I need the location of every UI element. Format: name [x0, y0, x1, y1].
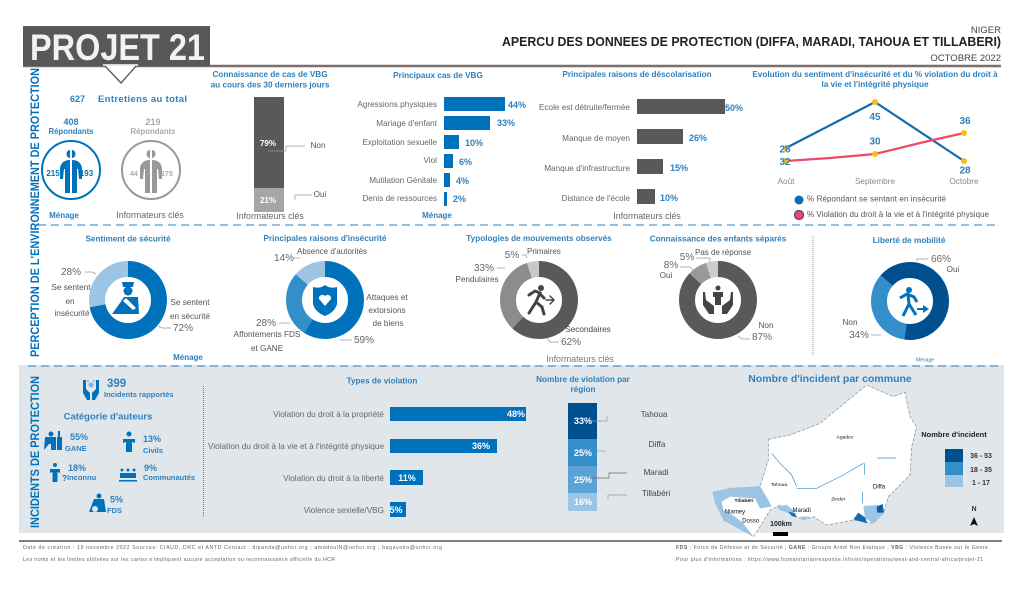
chart: main GBV cases: Mutilation Génitale [369, 176, 437, 185]
chart: violation types: 11% [398, 473, 416, 483]
icon: hands protecting a child [703, 286, 733, 314]
icon: civilians [123, 432, 135, 452]
chart: knowledge of GBV cases: 21% [260, 196, 276, 205]
donut: feeling of safety: en sécurité [170, 312, 210, 321]
donut: separated children: Connaissance des enfants séparés [650, 234, 787, 244]
section label: incidents: INCIDENTS DE PROTECTION [28, 376, 42, 528]
header title block: APERCU DES DONNEES DE PROTECTION (DIFFA, MARADI, TAHOUA ET TILLABERI) [502, 35, 1001, 49]
chart: knowledge of GBV cases: Oui [314, 190, 327, 199]
map legend: Nombre d'incident [921, 430, 987, 439]
panel: respondents: Entretiens au total [98, 94, 187, 105]
header title block: NIGER [971, 25, 1001, 36]
donut: feeling of safety: Se sentent [170, 298, 210, 307]
icon: communities [119, 468, 137, 482]
icon: key informants: 44 [130, 171, 138, 178]
donut: freedom of movement: Liberté de mobilité [873, 236, 946, 245]
map: incidents by commune: Agadez [837, 434, 854, 440]
chart: violations by region: Diffa [649, 440, 666, 449]
footer: sources and notes: Date de création : 19 novembre 2022 Sources: CIAUD, DRC et ANTD Contact : dipanda@unhcr.org ; amadoulN@unhcr.org ; bagayoko@unhcr.org [23, 545, 442, 551]
panel: incidents reported: Inconnu [67, 473, 97, 482]
donut: freedom of movement: 66% [931, 254, 951, 265]
chart: insecurity and rights-violation trend: Août [778, 177, 795, 186]
panel: respondents: Ménage [49, 211, 79, 220]
panel: incidents reported [44, 378, 195, 515]
chart: knowledge of GBV cases [211, 70, 330, 221]
chart: main GBV cases: Denis de ressources [362, 194, 437, 203]
chart: knowledge of GBV cases: au cours des 30 derniers jours [211, 80, 330, 90]
donut: reasons for insecurity: Principales raisons d'insécurité [264, 234, 387, 243]
chart: main GBV cases: 44% [508, 100, 526, 110]
donut: freedom of movement: Oui [947, 265, 960, 274]
chart: insecurity and rights-violation trend: 30 [869, 136, 881, 148]
donut: feeling of safety: Se sentent [51, 283, 91, 292]
chart: main GBV cases: Viol [423, 156, 437, 165]
chart: insecurity and rights-violation trend: 32 [779, 157, 791, 168]
chart: main GBV cases: 10% [465, 138, 483, 148]
map: incidents by commune: Dosso [742, 519, 760, 525]
panel: incidents reported: 18% [68, 463, 86, 473]
chart: main GBV cases: 2% [453, 194, 466, 204]
icon: person walking with arrow [900, 287, 929, 316]
map: incidents by commune: Nombre d'incident par commune [748, 373, 912, 385]
donut: freedom of movement: Ménage [916, 358, 934, 364]
icon: security forces [89, 494, 106, 512]
icon: key informants: 175 [161, 171, 173, 178]
donut: movement typologies [455, 234, 614, 364]
panel: incidents reported: FDS [107, 506, 122, 515]
chart: violations by region: Tahoua [641, 410, 668, 419]
map: incidents by commune: 100km [770, 521, 792, 528]
chart: violation types: Violation du droit à la propriété [273, 410, 384, 419]
chart: insecurity and rights-violation trend: Evolution du sentiment d'insécurité et du % violation du droit à [752, 70, 998, 79]
footer: sources and notes: Pour plus d'informations : https://www.humanitarianresponse.info/en/operations/west-and-central-africa/projet-21 [676, 557, 983, 563]
chart: insecurity and rights-violation trend: la vie et l'intégrité physique [821, 80, 929, 89]
panel: incidents reported: 399 [107, 378, 126, 390]
map: incidents by commune: Diffa [873, 485, 886, 491]
donut: separated children: Non [758, 321, 774, 330]
panel: incidents reported: 13% [143, 434, 161, 444]
chart: violation types: 5% [389, 505, 403, 515]
donut: movement typologies: Typologies de mouvements observés [466, 234, 612, 243]
icon: officer [112, 282, 139, 314]
donut: freedom of movement [842, 236, 960, 364]
chart: reasons for leaving school: Ecole est détruite/fermée [539, 103, 630, 112]
footer: sources and notes: Les noms et les limites utilisées sur les cartes n'impliquent aucune acceptation ou reconnaissance officielle du HCR [23, 557, 335, 563]
panel: respondents [42, 94, 187, 220]
icon: person moving [529, 285, 554, 314]
panel: respondents: 219 [145, 117, 161, 127]
map legend: 1 - 17 [972, 480, 990, 487]
chart: reasons for leaving school: 50% [725, 103, 743, 113]
icon: shield with heart [313, 285, 337, 316]
chart: main GBV cases: Ménage [422, 211, 452, 220]
panel: incidents reported: Civils [143, 446, 163, 455]
panel: respondents: 627 [70, 94, 85, 104]
panel: incidents reported: 55% [70, 432, 88, 442]
donut: reasons for insecurity: extorsions [368, 306, 406, 315]
donut: separated children: 87% [752, 332, 772, 343]
chart: violations by region: Tillabéri [642, 489, 670, 498]
donut: freedom of movement: Non [842, 318, 858, 327]
panel: incidents reported: Communautés [143, 473, 195, 482]
donut: reasons for insecurity: de biens [373, 319, 403, 328]
icon: household respondents [42, 141, 100, 199]
chart: violation types: 48% [507, 409, 525, 419]
donut: movement typologies: Pendulaires [455, 275, 499, 284]
donut: reasons for insecurity: 59% [354, 335, 374, 346]
map legend: 18 - 35 [970, 467, 992, 474]
donut: feeling of safety [51, 234, 210, 362]
map legend [921, 430, 992, 487]
logo: Projet 21 [23, 26, 210, 83]
chart: insecurity and rights-violation trend: 45 [869, 112, 881, 123]
chart: violations by region: 25% [574, 448, 592, 458]
chart: main GBV cases: 4% [456, 176, 469, 186]
chart: reasons for leaving school [539, 70, 743, 221]
icon: unknown: ? [62, 474, 67, 483]
panel: respondents: Répondants [130, 127, 176, 136]
map: incidents by commune: Tahoua [771, 482, 787, 488]
chart: insecurity and rights-violation trend: % Violation du droit à la vie et à l'intégrité physique [807, 210, 990, 219]
chart: insecurity and rights-violation trend: % Répondant se sentant en insécurité [807, 194, 947, 204]
chart: knowledge of GBV cases: Informateurs clés [236, 211, 304, 221]
chart: main GBV cases: 6% [459, 157, 472, 167]
donut: movement typologies: 5% [505, 250, 519, 261]
chart: insecurity and rights-violation trend: Septembre [855, 177, 895, 186]
map: incidents by commune: Maradi [793, 508, 811, 514]
chart: insecurity and rights-violation trend: Octobre [949, 177, 979, 186]
chart: knowledge of GBV cases: 79% [260, 139, 276, 148]
map: incidents by commune: Niamey [725, 510, 745, 516]
chart: violation types: Violation du droit à la liberté [283, 474, 384, 483]
logo: Projet 21: PROJET 21 [30, 27, 205, 68]
panel: incidents reported: 9% [144, 463, 157, 473]
chart: violations by region: Maradi [643, 468, 669, 477]
chart: violations by region: 25% [574, 475, 592, 485]
panel: incidents reported: Catégorie d'auteurs [64, 412, 152, 422]
chart: violations by region [536, 375, 670, 511]
chart: violation types: Violation du droit à la vie et à l'intégrité physique [208, 442, 384, 451]
donut: movement typologies: Primaires [527, 247, 561, 256]
donut: separated children: Oui [660, 271, 673, 280]
donut: movement typologies: 62% [561, 337, 581, 348]
panel: incidents reported: Incidents rapportés [104, 390, 174, 399]
chart: violations by region: région [570, 385, 596, 394]
panel: respondents: Informateurs clés [116, 210, 184, 220]
icon: north arrow [970, 506, 978, 526]
chart: main GBV cases: Exploitation sexuelle [362, 138, 437, 147]
footer: sources and notes [23, 545, 988, 563]
chart: insecurity and rights-violation trend: 28 [959, 166, 971, 176]
icon: north arrow: N [971, 506, 977, 513]
chart: reasons for leaving school: 26% [689, 133, 707, 143]
header title block [502, 25, 1001, 64]
chart: reasons for leaving school: Manque d'infrastructure [544, 164, 630, 173]
donut: separated children: Pas de réponse [695, 248, 752, 257]
chart: reasons for leaving school: Manque de moyen [562, 134, 630, 143]
panel: incidents background [19, 365, 1004, 533]
section label: perception: PERCEPTION DE L'ENVIRONNEMENT DE PROTECTION [28, 68, 42, 357]
chart: reasons for leaving school: Informateurs clés [613, 211, 681, 221]
donut: reasons for insecurity: Affontements FDS [234, 330, 301, 339]
map: incidents by commune: Tillabéri [734, 498, 754, 504]
chart: violations by region: 33% [574, 416, 592, 426]
donut: feeling of safety: en [65, 297, 75, 306]
donut: feeling of safety: Ménage [173, 353, 203, 362]
chart: reasons for leaving school: 10% [660, 193, 678, 203]
donut: feeling of safety: 28% [61, 267, 81, 278]
icon: hands [83, 380, 99, 400]
donut: feeling of safety: 72% [173, 323, 193, 334]
chart: violation types: Violence sexielle/VBG [304, 506, 384, 515]
header title block: OCTOBRE 2022 [930, 53, 1001, 64]
chart: reasons for leaving school: Distance de l'école [562, 194, 630, 203]
donut: feeling of safety: Sentiment de sécurité [85, 234, 171, 244]
map legend: 36 - 53 [970, 453, 992, 460]
map: incidents by commune [712, 373, 992, 537]
icon: key informants [122, 141, 180, 199]
chart: main GBV cases: Principaux cas de VBG [393, 71, 483, 80]
donut: reasons for insecurity [234, 234, 408, 353]
icon: armed groups [44, 431, 62, 450]
donut: reasons for insecurity: 14% [274, 253, 294, 264]
chart: insecurity and rights-violation trend: 36 [959, 116, 971, 127]
icon: household respondents: 193 [80, 169, 94, 178]
donut: reasons for insecurity: Attaques et [366, 293, 408, 302]
chart: insecurity and rights-violation trend [752, 70, 998, 220]
donut: freedom of movement: 34% [849, 330, 869, 341]
chart: reasons for leaving school: 15% [670, 163, 688, 173]
panel: incidents reported: 5% [110, 494, 123, 504]
donut: feeling of safety: insécurité [54, 309, 90, 318]
footer: sources and notes: FDS : Force de Défense et de Sécurité ; GANE : Groupe Armé Non Etatique ; VBG : Violence Basée sur le Genre [676, 545, 988, 551]
donut: reasons for insecurity: Absence d'autorités [297, 247, 367, 256]
panel: incidents reported: GANE [65, 444, 87, 453]
chart: violation types: Types de violation [347, 376, 417, 386]
chart: knowledge of GBV cases: Non [310, 141, 326, 150]
chart: insecurity and rights-violation trend: 28 [779, 144, 791, 156]
donut: reasons for insecurity: 28% [256, 318, 276, 329]
icon: household respondents: 215 [46, 169, 60, 178]
donut: separated children: 8% [664, 260, 678, 271]
donut: movement typologies: Informateurs clés [546, 354, 614, 364]
chart: violation types: 36% [472, 441, 490, 451]
icon: unknown [50, 463, 67, 483]
chart: reasons for leaving school: Principales raisons de déscolarisation [562, 70, 712, 79]
panel: respondents: 408 [63, 117, 79, 127]
chart: main GBV cases: Mariage d'enfant [376, 119, 438, 128]
donut: movement typologies: 33% [474, 263, 494, 274]
chart: main GBV cases: 33% [497, 118, 515, 128]
donut: movement typologies: Secondaires [565, 325, 611, 334]
chart: main GBV cases: Agressions physiques [357, 100, 437, 109]
chart: violation types [208, 376, 526, 517]
chart: violations by region: Nombre de violation par [536, 375, 631, 384]
donut: separated children: 5% [680, 252, 694, 263]
chart: violations by region: 16% [574, 497, 592, 507]
donut: separated children [650, 234, 787, 343]
chart: main GBV cases [357, 71, 526, 220]
panel: respondents: Répondants [48, 127, 94, 136]
chart: knowledge of GBV cases: Connaissance de cas de VBG [212, 70, 328, 79]
donut: reasons for insecurity: et GANE [251, 344, 284, 353]
map: incidents by commune: Zinder [831, 496, 846, 502]
